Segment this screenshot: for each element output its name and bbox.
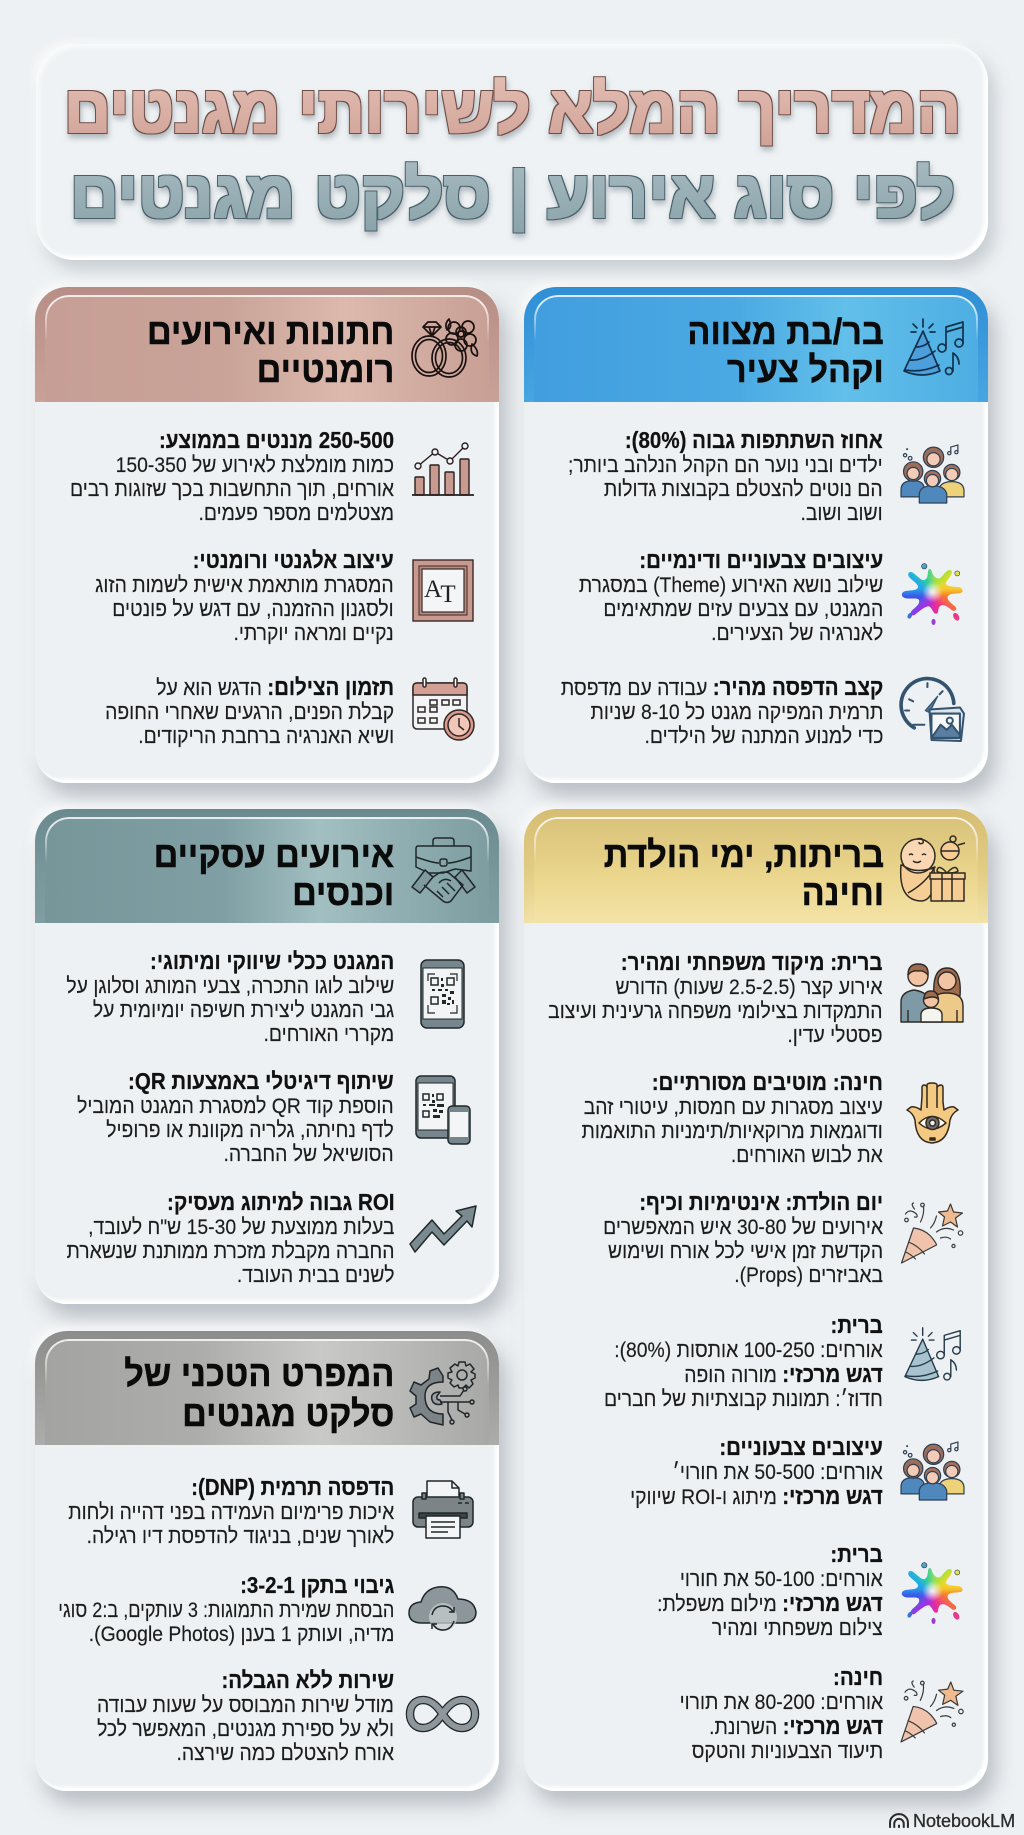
item: henna summary: תיעוד הצבעוניות והטקס (692, 1739, 883, 1763)
icon: color splash (902, 563, 962, 625)
item: henna summary: אורחים: 80-200 את תורוי (679, 1690, 883, 1714)
icon: party popper (900, 1202, 964, 1264)
item: participation: ושוב ושוב. (801, 501, 883, 525)
item: marketing tool: מקררי האורחים. (263, 1022, 394, 1046)
icon: rising arrow (409, 1205, 477, 1253)
item: backup: גיבוי בתקן 3-2-1: (240, 1572, 394, 1598)
icon: calendar and clock (412, 677, 475, 741)
icon: framed lettering: T (440, 581, 456, 608)
item: average magnets: מצטלמים מספר פעמים. (198, 501, 394, 525)
item: thermal printing: הדפסה תרמית (DNP): (191, 1474, 394, 1500)
item: bris details: דגש מרכזי: מורוה הופה (684, 1361, 883, 1387)
item: bris summary: אורחים: 50-100 את חורוי (680, 1567, 883, 1591)
item: QR sharing: שיתוף דיגיטלי באמצעות QR: (128, 1068, 394, 1094)
item: henna: חינה: מוטיבים מסורתיים: (652, 1069, 883, 1095)
item: marketing tool: המגנט ככלי שיווקי ומיתוגי: (150, 948, 394, 974)
title heading: המדריך המלא לשירותי מגנטים (64, 72, 961, 146)
item: elegant design: המסגרת מותאמת אישית לשמות הזוג (96, 573, 394, 597)
item: henna: ודוגמאות מרוקאיות/תימניות התואמות (582, 1119, 883, 1143)
item: bris details: אורחים: 100-250 אותסות (80%): (614, 1338, 883, 1362)
heading: בר/בת מצווה (688, 311, 884, 352)
item: colourful details: אורחים: 50-500 את חורוי׳ (673, 1460, 883, 1484)
item: bris details (604, 1312, 883, 1411)
item: bris summary: ברית: (831, 1541, 883, 1567)
panel header: weddings (35, 287, 499, 402)
panel: circumcision, birthdays, henna (524, 809, 988, 1791)
icon: rings and flower (411, 318, 478, 378)
icon: bar chart (412, 442, 474, 496)
icon: briefcase and handshake (411, 837, 476, 904)
panel: bar/bat mitzvah (524, 287, 988, 783)
item: unlimited service: שירות ללא הגבלה: (221, 1667, 394, 1693)
heading: וקהל צעיר (727, 349, 884, 390)
item: marketing tool: גבי המגנט ליצירת חשיפה יומיומית על (93, 998, 394, 1022)
item: ROI: ROI גבוה למיתוג מעסיק: (167, 1189, 394, 1215)
item: henna summary: חינה: (833, 1664, 883, 1690)
item: bris (548, 949, 883, 1047)
item: ROI (66, 1189, 394, 1287)
item: participation: ילדים ובני נוער הם הקהל הנלהב ביותר; (568, 453, 883, 477)
item: thermal printing: איכות פרימיום העמידה בפני דהייה ולחות (68, 1500, 394, 1524)
item: colorful designs: המגנט, עם צבעים עזים שמתאימים (603, 597, 883, 621)
icon: people group (900, 1441, 965, 1501)
icon: gear and circuit (410, 1360, 477, 1426)
icon: people group (900, 444, 965, 504)
icon: phone with QR code (420, 959, 465, 1029)
item: bris summary (657, 1541, 883, 1640)
icon: framed lettering (412, 559, 474, 622)
heading (153, 834, 394, 913)
item: bris: אירוע קצר (2.5-2.5 שעות) הדורש (616, 975, 883, 999)
item: QR sharing: הסושיאל של החברה. (224, 1142, 394, 1166)
heading: וכנסים (292, 872, 394, 913)
heading: וחינה (802, 872, 884, 913)
heading: רומנטיים (256, 349, 394, 390)
item: unlimited service: מודל שירות המבוסס על שעות עבודה (97, 1693, 394, 1717)
icon: color splash (902, 1562, 962, 1624)
item: birthday: באביזרים (Props). (734, 1263, 883, 1287)
item: colourful details: דגש מרכזי: מיתוג ו-ROI שיווקי (630, 1483, 883, 1509)
item: bris summary: צילום משפחתי ומהיר (712, 1616, 883, 1640)
item: average magnets: 250-500 מננטים בממוצע: (159, 427, 394, 453)
icon: tablet and phone (415, 1075, 471, 1145)
item: backup (35, 1573, 394, 1646)
item: ROI: החברה מקבלת מזכרת ממותנת שנשארת (66, 1239, 394, 1263)
heading (124, 1354, 394, 1433)
item: bris details: ברית: (831, 1312, 883, 1338)
item: colourful details (630, 1434, 883, 1509)
icon: cloud sync (408, 1585, 477, 1633)
item: photo timing: תזמון הצילום: הדגש הוא על (156, 674, 394, 700)
heading (604, 834, 884, 913)
icon: hat and notes (904, 1327, 961, 1382)
item: bris: התמקדות בצילומי משפחה גרעינית ועיצוב (549, 999, 883, 1023)
panel: technical specs (35, 1331, 499, 1791)
heading: בריתות, ימי הולדת (604, 834, 884, 875)
item: average magnets (70, 427, 394, 525)
item: QR sharing (77, 1068, 394, 1166)
panel header: technical specs (35, 1331, 499, 1445)
item: colorful designs: עיצובים צבעוניים ודינמיים: (639, 547, 883, 573)
item: birthday: הקדשת זמן אישי לכל אורח ושימוש (608, 1239, 883, 1263)
item: backup: מדיה, ועותק 1 בענן (Google Photos). (88, 1622, 394, 1646)
item: backup: הבסחת שמירת התמוגות: 3 עותקים, ב:2 סוגי (58, 1598, 394, 1622)
icon: gauge and photos (899, 676, 965, 742)
item: elegant design: עיצוב אלגנטי ורומנטי: (193, 547, 394, 573)
item: bris details: חדוז׳: תמונות קבוצתיות של חברים (604, 1387, 883, 1411)
icon: infinity (408, 1697, 477, 1731)
item: birthday (603, 1189, 883, 1287)
icon: family (900, 963, 964, 1023)
item: photo timing: קבלת הפנים, הרגעים שאחרי החופה (105, 700, 394, 724)
title panel (36, 44, 988, 260)
icon: party hat and notes (903, 318, 964, 376)
icon: baby and gift (900, 835, 966, 902)
item: photo timing: ושיא האנרגיה ברחבת הריקודים. (138, 724, 394, 748)
icon: hamsa (906, 1082, 959, 1144)
panel: weddings (35, 287, 499, 783)
item: elegant design (96, 547, 394, 645)
item: henna summary: דגש מרכזי: השרונת. (709, 1713, 883, 1739)
item: bris: ברית: מיקוד משפחתי ומהיר: (621, 949, 883, 975)
title heading (64, 72, 962, 240)
item: colorful designs (579, 547, 883, 645)
item: print speed: כדי למנוע המתנה של הילדים. (644, 724, 883, 748)
panel header: bar/bat mitzvah (524, 287, 988, 402)
item: birthday: יום הולדת: אינטימיות וכיף: (639, 1189, 883, 1215)
item: colourful details: עיצובים צבעוניים: (720, 1434, 883, 1460)
heading: אירועים עסקיים (153, 834, 394, 875)
item: henna: את לבוש האורחים. (731, 1143, 883, 1167)
item: elegant design: ולסגנון ההזמנה, עם דגש על פונטים (113, 597, 394, 621)
item: marketing tool: שילוב לוגו התכרה, צבעי המותג וסלוגן על (66, 974, 394, 998)
item: henna (582, 1069, 883, 1167)
item: print speed: תרמית המפיקה מגנט כל 8-10 שניות (590, 700, 883, 724)
panel header: circumcision, birthdays, henna (524, 809, 988, 923)
heading (688, 311, 884, 390)
item: bris: פסטלי עדין. (788, 1023, 883, 1047)
item: colorful designs: לאנרגיה של הצעירים. (711, 621, 883, 645)
item: average magnets: כמות מומלצת לאירוע של 150-350 (116, 453, 394, 477)
item: unlimited service: אורח להצטלם כמה שירצה. (177, 1741, 394, 1765)
panel: business events (35, 809, 499, 1304)
item: average magnets: אורחים, תוך התחשבות בכך שזוגות רבים (70, 477, 394, 501)
item: ROI: בעלות ממוצעת של 15-30 ש"ח לעובד, (88, 1215, 394, 1239)
item: participation: הם נוטים להצטלם בקבוצות גדולות (604, 477, 883, 501)
item: photo timing (105, 674, 394, 748)
heading: המפרט הטכני של (124, 1353, 394, 1394)
NotebookLM logo: NotebookLM (913, 1811, 1015, 1831)
item: print speed: קצב הדפסה מהיר: עבודה עם מדפסת (560, 674, 883, 700)
panel header: business events (35, 809, 499, 923)
item: ROI: לשנים בבית העובד. (236, 1263, 394, 1287)
item: thermal printing (68, 1475, 394, 1548)
item: unlimited service (97, 1668, 394, 1765)
item: birthday: אירועים של 30-80 איש המאפשרים (603, 1215, 883, 1239)
icon: framed lettering: A (424, 576, 442, 603)
item: elegant design: נקיים ומראה יוקרתי. (234, 621, 394, 645)
item: QR sharing: הוספת קוד QR למסגרת המגנט המוביל (77, 1094, 394, 1118)
item: marketing tool (66, 948, 394, 1046)
icon: NotebookLM mark (889, 1813, 909, 1828)
item: participation (568, 427, 883, 525)
item: participation: אחוז השתתפות גבוה (80%): (625, 427, 883, 453)
heading (147, 311, 394, 390)
icon: party popper (900, 1680, 964, 1743)
item: colorful designs: שילוב נושא האירוע (Theme) במסגרת (579, 573, 883, 597)
title heading: לפי סוג אירוע | סלקט מגנטים (70, 157, 955, 233)
item: bris summary: דגש מרכזי: מילום משפלת: (657, 1590, 883, 1616)
item: QR sharing: לדף נחיתה, גלריה מקוונת או פרופיל (107, 1118, 394, 1142)
item: henna summary (679, 1664, 883, 1763)
heading: סלקט מגנטים (182, 1392, 394, 1434)
item: thermal printing: לאורך שנים, בניגוד להדפסת דיו רגילה. (86, 1524, 394, 1548)
item: henna: עיצוב מסגרות עם חמסות, עיטורי זהב (584, 1095, 883, 1119)
item: unlimited service: ולא על ספירת מגנטים, המאפשר לכל (97, 1717, 394, 1741)
heading: חתונות ואירועים (147, 311, 394, 352)
item: print speed (560, 674, 883, 748)
icon: printer (412, 1480, 474, 1539)
